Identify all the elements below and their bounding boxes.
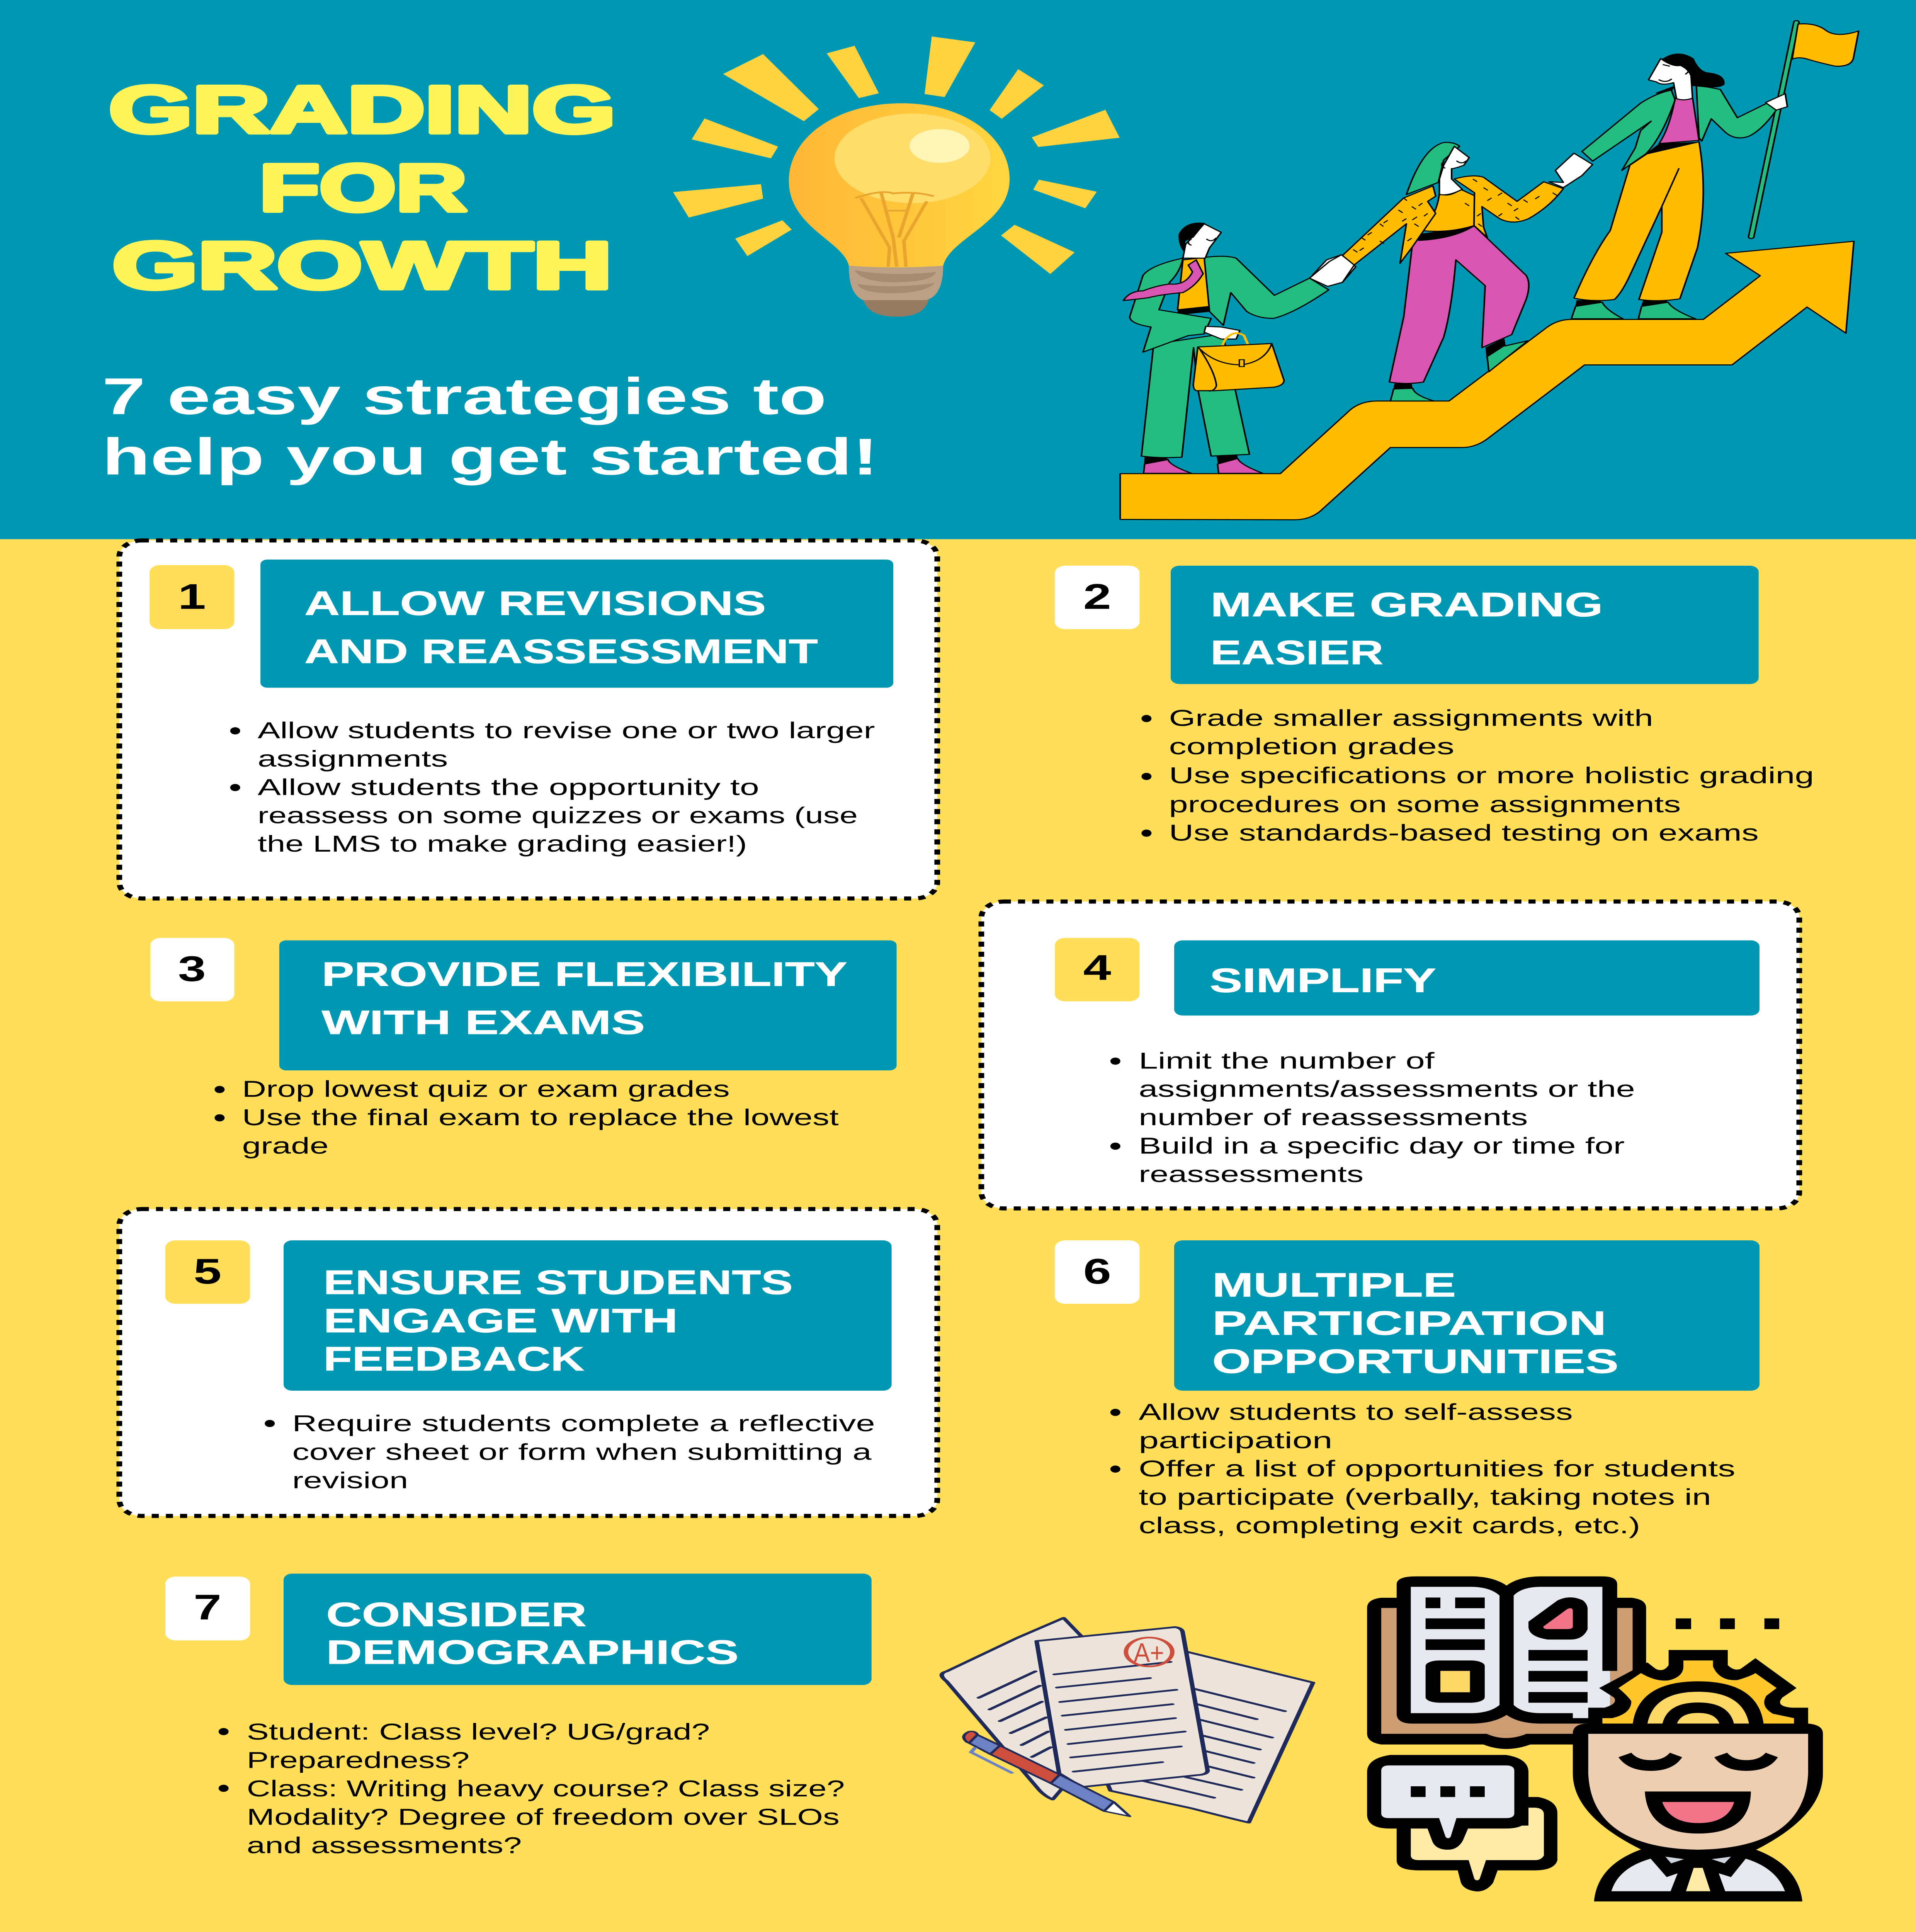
text block 2 <box>1141 706 1814 845</box>
number badge 1 <box>150 565 234 629</box>
panel 7: demographics <box>165 1573 872 1858</box>
grade mark: A+ <box>1134 1638 1164 1668</box>
text block 1: the LMS to make grading easier!) <box>258 831 747 857</box>
heading 3: PROVIDE FLEXIBILITY <box>321 955 847 993</box>
text block 6 <box>1110 1400 1735 1538</box>
illustration: people climbing arrow <box>1120 22 1859 520</box>
person 3 with flag <box>1571 22 1859 319</box>
text block 6: class, completing exit cards, etc.) <box>1139 1513 1640 1538</box>
subtitle: help you get started! <box>102 428 879 486</box>
text block 3: Use the final exam to replace the lowest <box>242 1105 839 1130</box>
number badge 5 <box>165 1240 250 1304</box>
heading 1 <box>260 560 893 688</box>
text block 7 <box>219 1719 845 1858</box>
text block 3 <box>214 1077 839 1159</box>
heading 6: PARTICIPATION <box>1212 1304 1607 1342</box>
header band <box>0 0 1916 539</box>
text block 1 <box>230 718 875 857</box>
icon: open book <box>1367 1577 1779 1749</box>
heading 7: CONSIDER <box>326 1595 587 1634</box>
title: GROWTH <box>112 228 612 303</box>
text block 2: Grade smaller assignments with <box>1169 706 1653 731</box>
number badge 1: 1 <box>178 577 206 616</box>
heading 5: FEEDBACK <box>323 1340 585 1378</box>
text block 4 <box>1110 1048 1635 1187</box>
text block 3: grade <box>242 1133 328 1159</box>
text block 5: Require students complete a reflective <box>292 1411 875 1436</box>
text block 4: number of reassessments <box>1139 1105 1528 1130</box>
text block 4: Limit the number of <box>1139 1048 1435 1074</box>
number badge 7: 7 <box>194 1587 221 1627</box>
text block 4: assignments/assessments or the <box>1139 1077 1635 1102</box>
heading 4 <box>1174 940 1760 1015</box>
panel 3: flexibility with exams <box>150 938 897 1159</box>
heading 5 <box>284 1240 892 1391</box>
heading 6: MULTIPLE <box>1212 1266 1456 1304</box>
number badge 4: 4 <box>1083 947 1111 987</box>
number badge 7 <box>165 1577 250 1640</box>
text block 4: Build in a specific day or time for <box>1139 1133 1625 1159</box>
number badge 3: 3 <box>178 949 206 989</box>
heading 5: ENSURE STUDENTS <box>323 1263 793 1301</box>
illustration: graded papers and pen <box>942 1618 1313 1823</box>
heading 7 <box>284 1573 872 1685</box>
heading 6 <box>1174 1240 1760 1391</box>
icon: speech bubbles <box>1367 1755 1557 1891</box>
heading 6: OPPORTUNITIES <box>1212 1342 1618 1380</box>
text block 5: cover sheet or form when submitting a <box>292 1440 872 1465</box>
text block 7: Modality? Degree of freedom over SLOs <box>247 1804 840 1830</box>
rising arrow <box>1120 241 1854 520</box>
number badge 5: 5 <box>194 1251 221 1291</box>
heading 1: ALLOW REVISIONS <box>304 584 766 622</box>
number badge 2 <box>1055 566 1139 629</box>
number badge 6 <box>1055 1240 1139 1304</box>
text block 6: to participate (verbally, taking notes in <box>1139 1485 1711 1510</box>
number badge 4 <box>1055 938 1139 1002</box>
icon: light bulb with rays <box>673 36 1120 317</box>
subtitle <box>102 367 879 486</box>
text block 7: Class: Writing heavy course? Class size? <box>247 1776 845 1801</box>
text block 6: Offer a list of opportunities for students <box>1139 1456 1735 1481</box>
number badge 6: 6 <box>1083 1251 1111 1291</box>
text block 6: Allow students to self-assess <box>1139 1400 1573 1425</box>
text block 1: Allow students to revise one or two larger <box>258 718 875 743</box>
heading 5: ENGAGE WITH <box>323 1301 678 1340</box>
panel 1: allow revisions <box>119 541 937 898</box>
heading 1: AND REASSESSMENT <box>304 632 818 670</box>
number badge 2: 2 <box>1083 577 1111 616</box>
subtitle: 7 easy strategies to <box>102 367 826 425</box>
text block 6: participation <box>1139 1428 1332 1453</box>
icon: gear <box>1588 1650 1808 1726</box>
heading 7: DEMOGRAPHICS <box>326 1633 739 1671</box>
number badge 3 <box>150 938 234 1002</box>
heading 2: EASIER <box>1210 634 1384 672</box>
heading 2: MAKE GRADING <box>1210 585 1603 624</box>
text block 2: Use standards-based testing on exams <box>1169 820 1759 845</box>
text block 2: completion grades <box>1169 734 1454 759</box>
panel 5: engage with feedback <box>119 1209 937 1516</box>
text block 7: Preparedness? <box>247 1748 469 1773</box>
panel 4: simplify <box>981 901 1799 1208</box>
heading 2 <box>1171 566 1759 684</box>
text block 5 <box>265 1411 875 1493</box>
text block 4: reassessments <box>1139 1162 1363 1187</box>
text block 7: and assessments? <box>247 1833 522 1858</box>
title <box>109 73 615 303</box>
text block 5: revision <box>292 1468 408 1493</box>
person 2 <box>1312 143 1593 401</box>
title: GRADING <box>109 73 615 147</box>
heading 3: WITH EXAMS <box>321 1003 645 1041</box>
text block 1: reassess on some quizzes or exams (use <box>258 803 858 828</box>
text block 7: Student: Class level? UG/grad? <box>247 1719 710 1745</box>
person 1 with briefcase <box>1123 223 1354 473</box>
text block 3: Drop lowest quiz or exam grades <box>242 1077 730 1102</box>
heading 3 <box>279 940 897 1070</box>
text block 1: assignments <box>258 746 448 772</box>
panel 6: participation <box>1055 1240 1760 1538</box>
illustration: thinking head with book, gear and speech bubbles <box>1367 1577 1823 1901</box>
heading 4: SIMPLIFY <box>1210 961 1436 999</box>
icon: smiling person <box>1573 1724 1823 1901</box>
text block 2: Use specifications or more holistic grading <box>1169 763 1814 788</box>
pen <box>964 1731 1130 1816</box>
text block 1: Allow students the opportunity to <box>258 775 759 800</box>
panel 2: make grading easier <box>1055 566 1814 845</box>
text block 2: procedures on some assignments <box>1169 792 1681 817</box>
title: FOR <box>259 151 467 225</box>
